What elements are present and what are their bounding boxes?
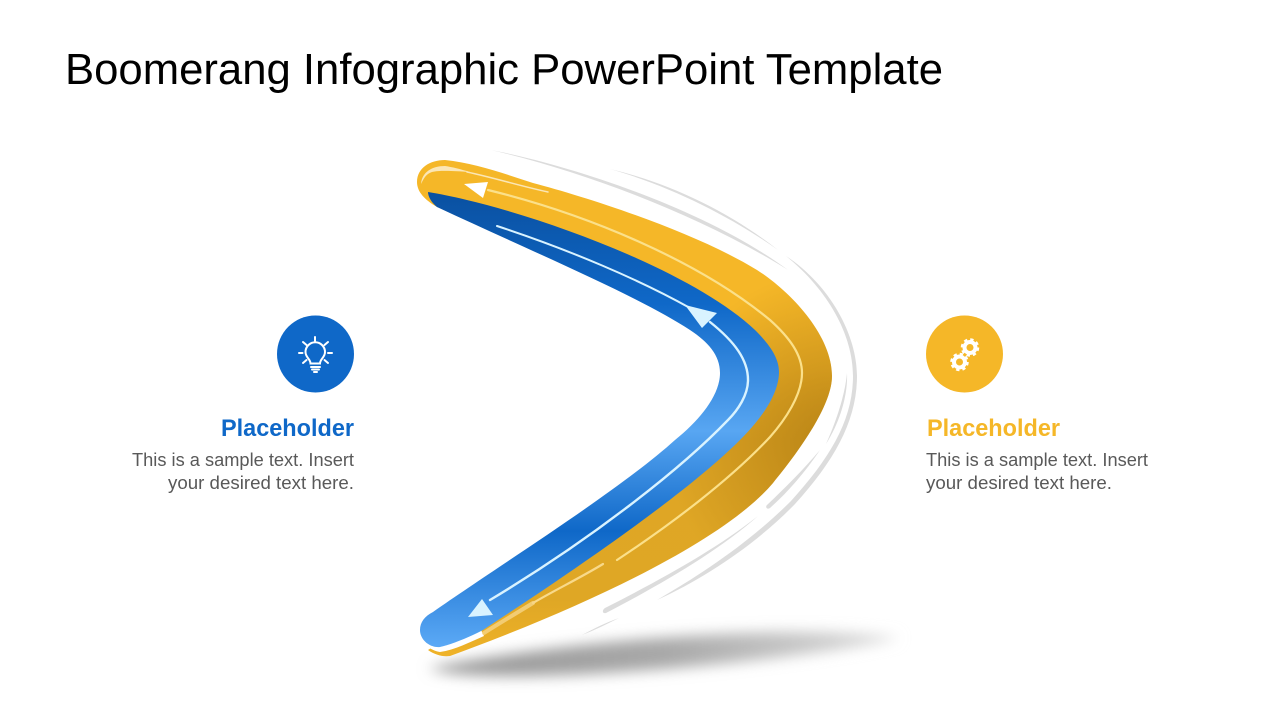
body text: your desired text here. bbox=[168, 473, 354, 493]
icon: gears bbox=[926, 316, 1003, 392]
left callout bbox=[132, 316, 354, 493]
body text: This is a sample text. Insert bbox=[926, 450, 1148, 470]
heading: Placeholder bbox=[927, 415, 1060, 442]
motion lines bbox=[491, 150, 857, 635]
title: Boomerang Infographic PowerPoint Template bbox=[65, 45, 943, 94]
yellow wing bbox=[417, 160, 832, 656]
white gap at lower tip bbox=[420, 628, 484, 652]
ground shadow bbox=[428, 632, 900, 676]
blue wing flow line bbox=[490, 226, 748, 600]
yellow wing tip gloss bbox=[421, 166, 470, 184]
arrow: blue wing lower bbox=[468, 599, 493, 617]
blue wing bbox=[420, 192, 779, 647]
yellow wing highlights bbox=[467, 172, 802, 633]
arrow: blue wing upper bbox=[685, 305, 717, 328]
body text bbox=[132, 450, 354, 493]
body text bbox=[926, 450, 1148, 493]
right callout bbox=[926, 316, 1148, 493]
body text: This is a sample text. Insert bbox=[132, 450, 354, 470]
boomerang bbox=[417, 160, 832, 656]
icon: light bulb bbox=[277, 316, 354, 392]
heading: Placeholder bbox=[221, 415, 354, 442]
body text: your desired text here. bbox=[926, 473, 1112, 493]
arrow: yellow wing bbox=[464, 182, 488, 198]
